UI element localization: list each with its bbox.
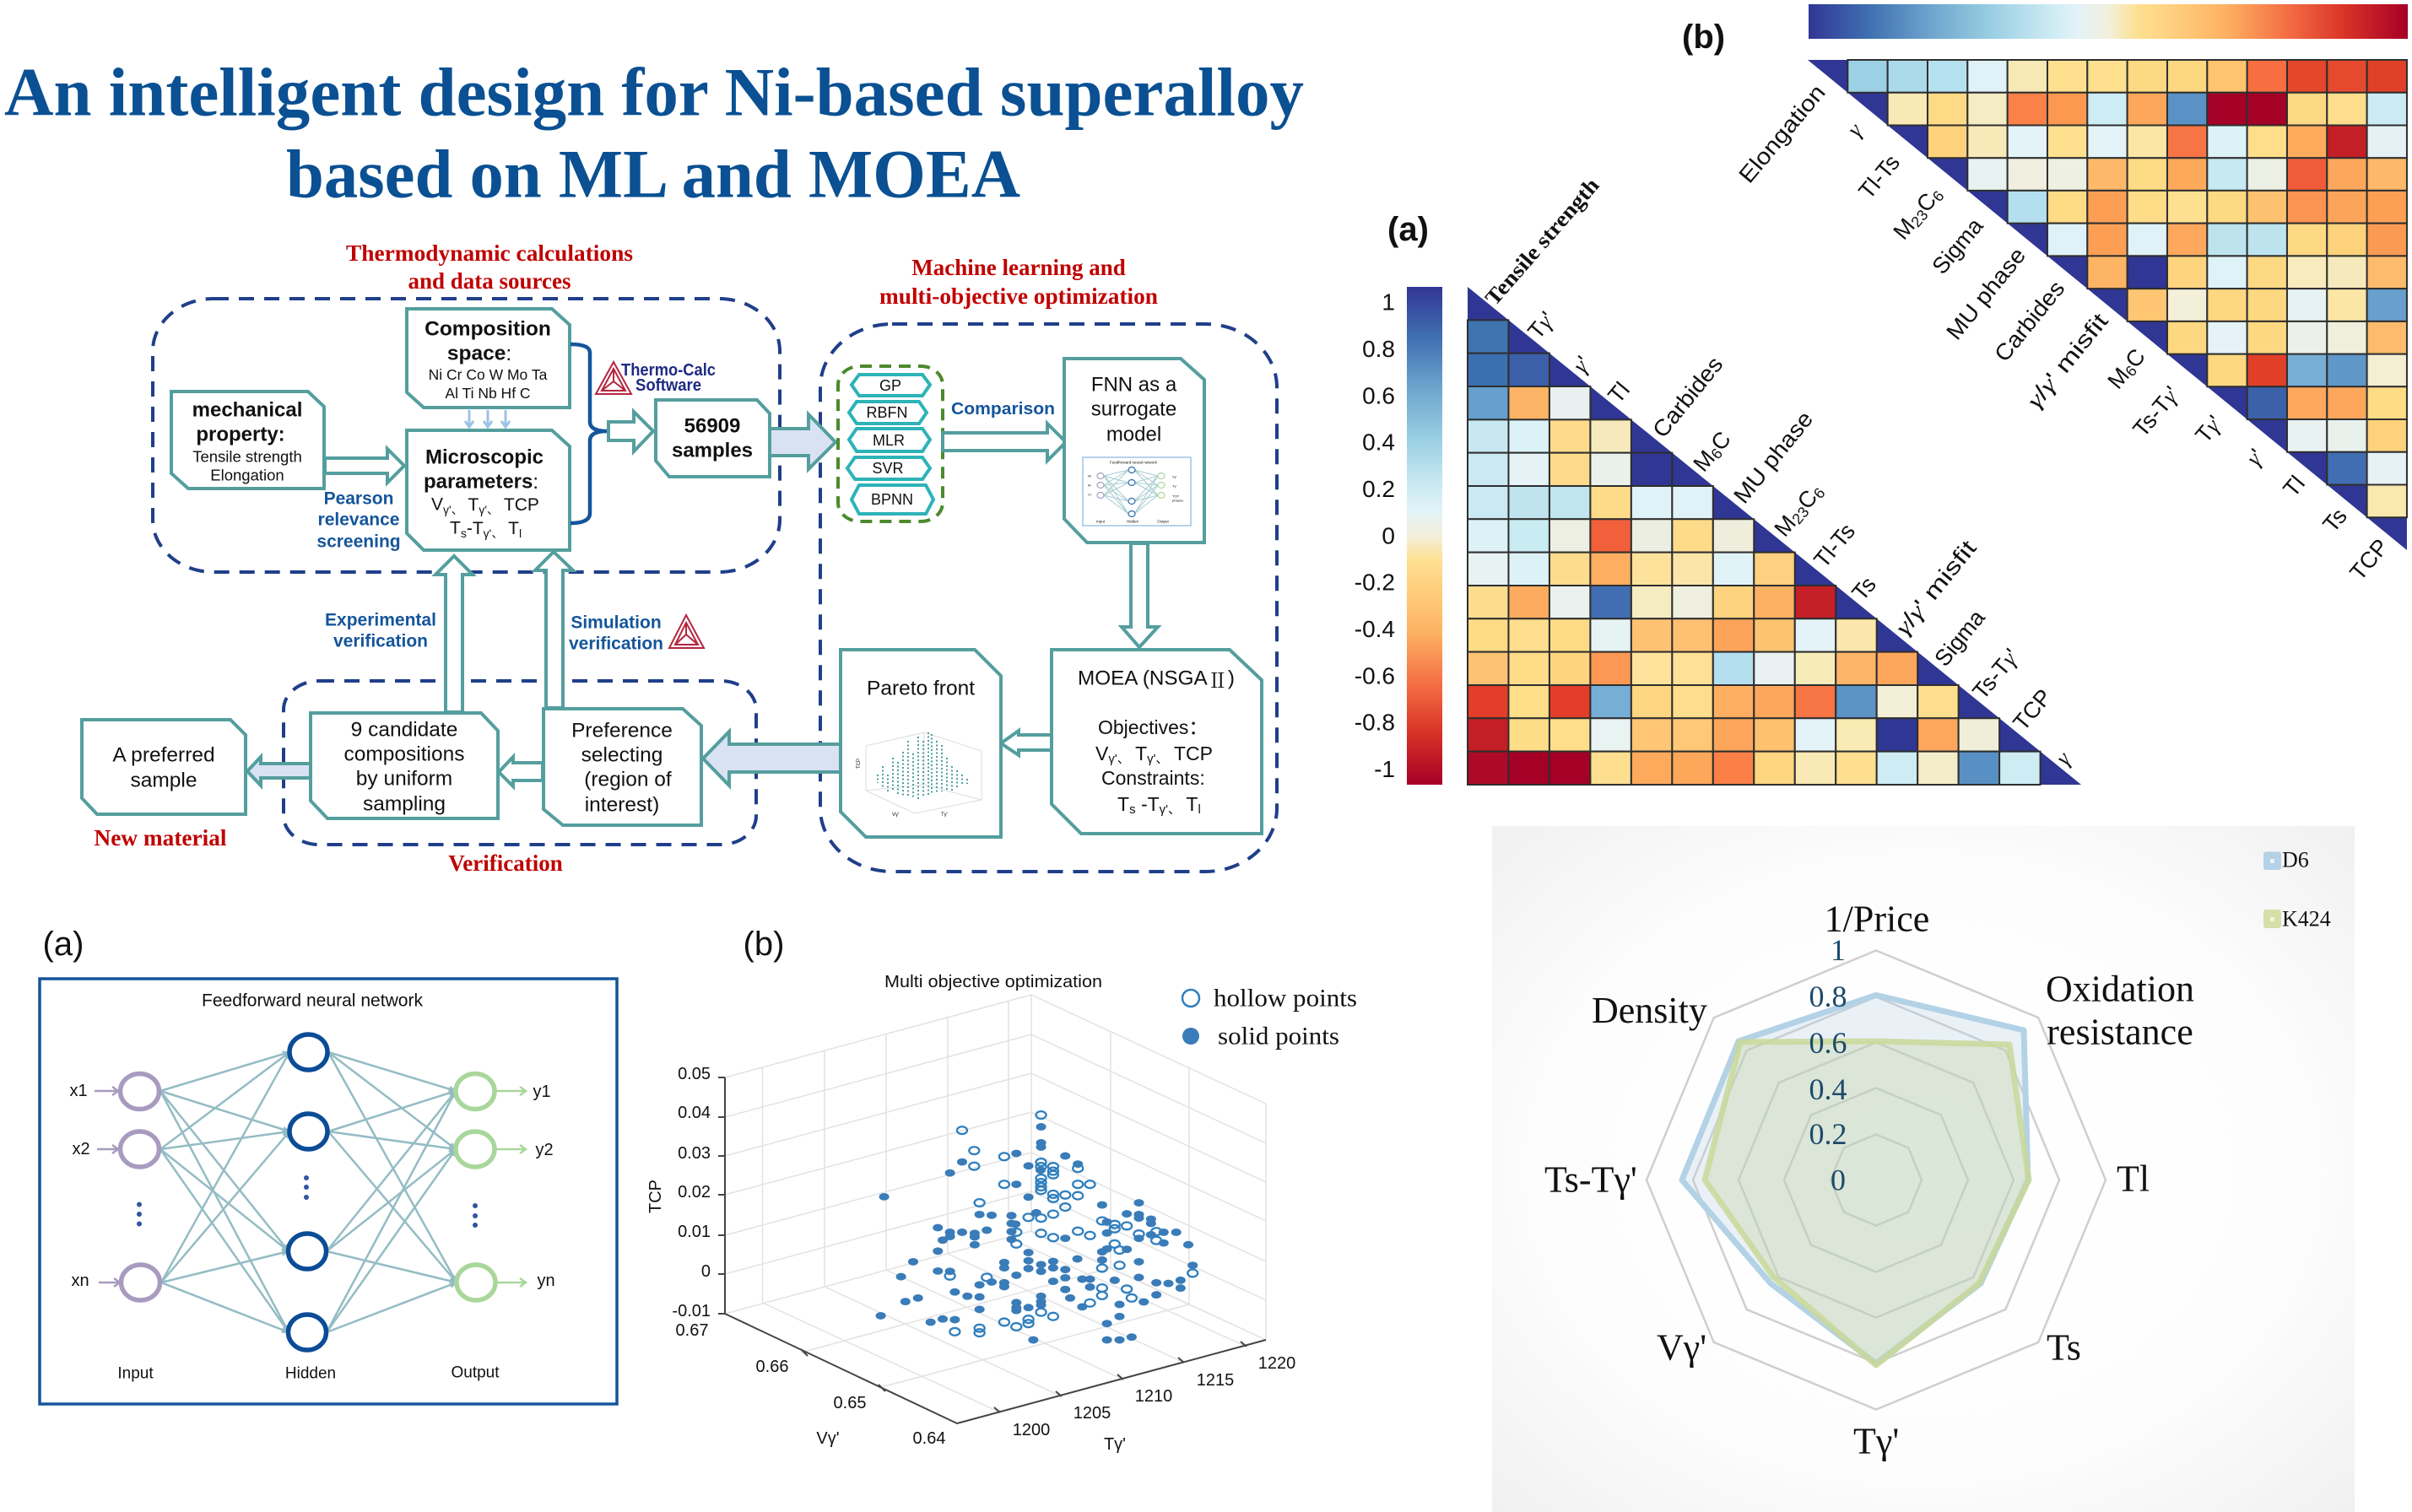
box: MOEA NSGA-II: Constraints:: [1101, 767, 1205, 789]
box: microscopic parameters: T: [463, 494, 479, 515]
box: composition space: Al Ti Nb Hf C: [445, 385, 531, 402]
panel: radar chart: [1492, 826, 2355, 1512]
column labels: 23: [1788, 504, 1813, 527]
column labels: Tγ': [1523, 307, 1560, 344]
model: MLR: [849, 429, 930, 451]
text: experimental verification: verification: [333, 631, 428, 651]
colorbar ticks: 1: [1382, 289, 1395, 316]
legend: hollow points: [1214, 984, 1357, 1012]
colorbar ticks: -0.4: [1355, 616, 1395, 642]
model: BPNN: [852, 485, 933, 514]
box: preferred sample: sample: [131, 770, 197, 791]
row labels: γ: [1842, 117, 1868, 142]
axis labels: Ts: [2047, 1326, 2081, 1369]
icon: Thermo-Calc logo: Thermo-Calc: [621, 361, 716, 380]
panel label (b): (b): [744, 926, 784, 963]
chart: mini Pareto scatter: Vγ': [892, 813, 899, 818]
V-gamma tick labels: 0.64: [913, 1429, 945, 1448]
octagon rings: [1647, 950, 2106, 1409]
dashed region: thermodynamic data: [153, 299, 780, 572]
box: microscopic parameters: T: [450, 518, 461, 538]
axis labels: Tl: [2117, 1158, 2150, 1200]
arrow: simulation verification: [535, 552, 573, 708]
heading: thermodynamic calculations: [346, 240, 633, 294]
heading: thermodynamic calculations: Thermodynamic calculations: [346, 240, 633, 266]
column labels: Ts-Tγ': [1968, 644, 2024, 705]
box: MOEA NSGA-II: TCP: [1169, 742, 1213, 764]
colorbar ticks: -0.8: [1355, 709, 1395, 736]
model: BPNN: BPNN: [871, 491, 913, 508]
chart: mini Pareto scatter: [857, 732, 982, 818]
colorbar ticks: -1: [1374, 756, 1395, 782]
text: simulation verification: [569, 613, 663, 653]
row labels: Carbides: [1989, 276, 2069, 366]
box: FNN surrogate model: [1064, 359, 1204, 543]
text: simulation verification: verification: [569, 634, 663, 653]
icon: mini neural network: phases: [1172, 498, 1183, 503]
row labels: Tl: [2279, 471, 2310, 502]
node labels: [69, 1082, 555, 1290]
arrow: MOEA to Pareto: [1001, 731, 1052, 755]
arrow: Pareto to preference: [703, 732, 841, 786]
box: mechanical property: Elongation: [210, 466, 284, 484]
hidden nodes: [289, 1034, 327, 1350]
icon: mini neural network: Vγ': [1172, 474, 1177, 479]
column labels: M: [1770, 510, 1801, 542]
panel: flowchart: [82, 240, 1277, 876]
column labels: M: [1689, 446, 1720, 477]
row labels: TCP: [2345, 534, 2393, 586]
column labels: Sigma: [1929, 604, 1990, 671]
TCP tick labels: [672, 1065, 711, 1320]
scale numbers: 0.4: [1809, 1072, 1847, 1106]
box: 9 candidate compositions: compositions: [344, 742, 464, 766]
TCP tick labels: 0: [701, 1262, 711, 1281]
icon: mini neural network: TCP: [1172, 494, 1179, 498]
column labels: γ: [2051, 746, 2076, 770]
box: mechanical property: [171, 392, 324, 489]
scale numbers: [1809, 933, 1847, 1196]
text: Pearson relevance screening: [316, 489, 401, 552]
TCP tick labels: 0.02: [678, 1183, 711, 1202]
box: microscopic parameters: Microscopic: [425, 446, 544, 469]
title: An intelligent design for Ni-based superalloy: [4, 54, 1304, 130]
box: MOEA NSGA-II: T: [1117, 793, 1129, 815]
panel: heatmap (a): [1355, 173, 2081, 785]
legend: [2263, 847, 2331, 932]
V-gamma tick labels: [676, 1321, 945, 1448]
axis labels: 1/Price: [1825, 898, 1929, 940]
row labels: M: [1889, 213, 1920, 245]
column labels: TCP: [2009, 684, 2057, 736]
chart title: Multi objective optimization: [884, 973, 1102, 991]
box: composition space: Composition: [425, 317, 551, 341]
row labels: Ts-Tγ': [2128, 381, 2184, 442]
output arrows: [496, 1087, 526, 1287]
arrow: preference to candidates: [499, 757, 543, 786]
axis labels: Vγ': [816, 1429, 840, 1448]
output nodes: [456, 1073, 495, 1300]
panel: heatmap (b): [1682, 4, 2408, 586]
ellipsis dots: [137, 1175, 478, 1228]
icon: mini neural network: Input: [1096, 520, 1106, 523]
column labels: [1480, 173, 2076, 770]
axis labels: Tγ': [1853, 1421, 1899, 1461]
heading: machine learning: multi-objective optimization: [879, 284, 1158, 309]
panel label (b): (b): [1682, 19, 1725, 56]
icon: Thermo-Calc logo: Software: [635, 376, 701, 395]
legend: D6: [2282, 847, 2309, 872]
title: [4, 54, 1304, 213]
column labels: Tl-Ts: [1809, 519, 1860, 573]
box: MOEA NSGA-II: [1052, 650, 1262, 834]
row labels: 23: [1907, 207, 1932, 230]
box: microscopic parameters: s: [461, 526, 467, 540]
row labels: Ts: [2318, 504, 2352, 537]
T-gamma tick labels: 1210: [1135, 1387, 1172, 1406]
model: RBFN: [849, 402, 927, 424]
box: preference selecting: selecting: [581, 744, 662, 766]
box: preference selecting: interest): [585, 793, 659, 817]
grid: [725, 995, 1266, 1412]
model: SVR: SVR: [872, 460, 904, 477]
box: preferred sample: [82, 720, 246, 814]
group: candidate models: [838, 366, 943, 521]
T-gamma tick labels: 1200: [1013, 1421, 1050, 1439]
row labels: Sigma: [1928, 213, 1988, 279]
label: Verification: Verification: [448, 850, 563, 876]
node labels: y1: [533, 1083, 551, 1101]
arrow: candidates to preferred sample: [247, 757, 311, 786]
scale numbers: 0.6: [1809, 1026, 1847, 1060]
scale numbers: 0: [1831, 1163, 1846, 1196]
V-gamma tick labels: 0.67: [676, 1321, 708, 1340]
T-gamma tick labels: 1215: [1197, 1371, 1234, 1390]
model: GP: GP: [879, 377, 901, 394]
T-gamma tick labels: 1205: [1074, 1404, 1111, 1423]
node labels: x2: [72, 1140, 90, 1158]
colorbar ticks: 0.4: [1362, 429, 1395, 456]
chart: mini Pareto scatter: Tγ': [941, 813, 948, 818]
arrow: FNN to MOEA: [1122, 543, 1158, 647]
row labels: [1734, 80, 2393, 586]
box: 9 candidate compositions: [311, 713, 498, 818]
bracket: [571, 344, 608, 523]
box: FNN surrogate model: model: [1106, 424, 1161, 446]
colorbar ticks: -0.2: [1355, 569, 1395, 596]
box: microscopic parameters: γ'、: [479, 503, 499, 516]
column labels: Carbides: [1647, 352, 1728, 442]
row labels: MU phase: [1941, 243, 2031, 344]
row labels: Elongation: [1734, 80, 1831, 188]
box: microscopic parameters: -T: [467, 518, 484, 538]
layer labels: [117, 1364, 500, 1382]
column labels: γ/γ' misfit: [1890, 535, 1982, 640]
axes: [718, 1077, 1266, 1423]
box: MOEA NSGA-II: MOEA (NSGAⅡ): [1078, 663, 1235, 694]
box: FNN surrogate model: FNN as a: [1091, 373, 1177, 397]
column labels: Tensile strength: [1480, 173, 1604, 310]
column labels: γ': [1568, 351, 1596, 378]
arrow: bracket to samples: [608, 412, 653, 451]
box: mechanical property: property:: [196, 424, 285, 446]
panel label (a): (a): [43, 926, 84, 963]
series: D6: [1682, 995, 2028, 1364]
hollow points: [945, 1111, 1198, 1336]
icon: mini neural network: Output: [1157, 520, 1170, 523]
box: 9 candidate compositions: sampling: [363, 793, 446, 815]
colorbar ticks: 0.2: [1362, 476, 1395, 502]
node labels: y2: [535, 1141, 554, 1159]
layer labels: Input: [117, 1365, 154, 1382]
row labels: 6: [1929, 187, 1948, 205]
box: MOEA NSGA-II: -T: [1136, 793, 1160, 815]
heading: machine learning: [879, 255, 1158, 309]
model: RBFN: RBFN: [866, 404, 908, 421]
box: MOEA NSGA-II: γ'、: [1147, 751, 1169, 766]
colorbar ticks: 0: [1382, 523, 1395, 548]
TCP tick labels: 0.01: [678, 1223, 711, 1241]
icon: Thermo-Calc logo: [596, 361, 716, 395]
row labels: C: [1912, 188, 1941, 217]
column labels: C: [1793, 485, 1822, 514]
column labels: C: [1706, 427, 1736, 456]
V-gamma tick labels: 0.66: [756, 1358, 788, 1376]
scale numbers: 0.2: [1809, 1117, 1847, 1151]
box: FNN surrogate model: surrogate: [1091, 398, 1176, 420]
icon: mini neural network: Feedforward neural network: [1110, 461, 1158, 464]
box: 9 candidate compositions: by uniform: [356, 768, 452, 790]
colorbar ticks: -0.6: [1355, 663, 1395, 688]
column labels: MU phase: [1728, 407, 1818, 508]
arrow: experimental verification: [435, 556, 473, 712]
model: SVR: [847, 457, 930, 479]
input arrows: [95, 1087, 120, 1287]
box: 56909 samples: 56909: [684, 415, 740, 437]
panel: neural network (a): [40, 926, 617, 1404]
axis labels: [646, 1180, 1126, 1454]
colorbar ticks: 0.8: [1362, 336, 1395, 362]
legend: K424: [2282, 906, 2331, 932]
column labels: Tl: [1603, 377, 1635, 408]
row labels: Tl-Ts: [1854, 150, 1905, 204]
T-gamma tick labels: 1220: [1258, 1354, 1295, 1373]
scale numbers: 0.8: [1809, 980, 1847, 1013]
model: GP: [852, 375, 930, 396]
series: K424: [1705, 1041, 2029, 1365]
icon: mini neural network: Ni: [1088, 474, 1091, 478]
points: [881, 1111, 1198, 1340]
axis labels: [1544, 898, 2194, 1461]
box: composition space: space:: [447, 343, 511, 364]
icon: mini neural network: Cr: [1088, 493, 1092, 496]
box: microscopic parameters: γ'、: [484, 526, 503, 540]
box: 56909 samples: samples: [672, 439, 753, 462]
box: MOEA NSGA-II: T: [1130, 742, 1147, 764]
input nodes: [120, 1073, 160, 1300]
label: Comparison: Comparison: [951, 400, 1055, 418]
box: microscopic parameters: parameters:: [424, 471, 538, 493]
axis labels: Oxidation: [2046, 969, 2194, 1009]
heatmap cells: [1468, 287, 2081, 785]
box: MOEA NSGA-II: s: [1129, 802, 1136, 817]
axis labels: Ts-Tγ': [1544, 1159, 1637, 1200]
column labels: 6: [1707, 446, 1726, 462]
colorbar ticks: [1355, 289, 1395, 782]
text: experimental verification: Experimental: [325, 611, 436, 629]
TCP tick labels: 0.03: [678, 1144, 711, 1163]
dashed region: verification: [284, 681, 756, 845]
solid points: [881, 1126, 1192, 1340]
box: MOEA NSGA-II: γ'、: [1160, 802, 1181, 817]
box: microscopic parameters: T: [503, 518, 519, 538]
colorbar: [1809, 4, 2408, 39]
box: preferred sample: A preferred: [112, 744, 215, 766]
node labels: xn: [71, 1272, 89, 1290]
node labels: x1: [69, 1082, 88, 1100]
arrow: models to FNN: [943, 424, 1066, 461]
box: Pareto front: [841, 650, 1001, 837]
row labels: γ/γ' misfit: [2021, 308, 2113, 413]
title: based on ML and MOEA: [286, 135, 1020, 213]
text: Pearson relevance screening: relevance: [318, 510, 399, 530]
TCP tick labels: -0.01: [672, 1302, 711, 1320]
axis labels: Density: [1592, 990, 1707, 1031]
panel label (a): (a): [1387, 211, 1429, 248]
column labels: 6: [1810, 484, 1829, 502]
box: microscopic parameters: l: [519, 526, 522, 540]
layer labels: Output: [451, 1364, 500, 1382]
box: mechanical property: mechanical: [192, 398, 302, 422]
chart: mini Pareto scatter: TCP: [857, 759, 862, 769]
background: [1492, 826, 2355, 1512]
box: mechanical property: Tensile strength: [192, 447, 302, 466]
axis labels: Vγ': [1657, 1326, 1706, 1369]
icon: mini neural network: Tγ': [1172, 484, 1176, 488]
layer labels: Hidden: [285, 1365, 336, 1382]
connections: [160, 1052, 457, 1332]
box: MOEA NSGA-II: l: [1198, 802, 1201, 817]
text: experimental verification: [325, 611, 436, 651]
text: Pearson relevance screening: screening: [316, 532, 401, 552]
box: microscopic parameters: γ'、: [443, 503, 463, 516]
box: 9 candidate compositions: 9 candidate: [351, 719, 457, 741]
box: MOEA NSGA-II: V: [1095, 742, 1108, 764]
box: microscopic parameters: TCP: [499, 494, 539, 515]
icon: Thermo-Calc triangle: [669, 615, 704, 648]
heatmap cells: [1808, 60, 2407, 550]
box: Pareto front: Pareto front: [867, 677, 975, 700]
row labels: C: [2120, 344, 2150, 373]
arrow: mechanical property to microscopic: [325, 449, 404, 483]
box: MOEA NSGA-II: Objectives：: [1098, 716, 1208, 738]
box: 56909 samples: [656, 400, 770, 477]
box: MOEA NSGA-II: γ'、: [1108, 751, 1130, 766]
box: preference selecting: (region of: [584, 768, 672, 791]
arrows: composition to microscopic: [465, 410, 510, 427]
row labels: Tγ': [2191, 411, 2227, 448]
box: MOEA NSGA-II: T: [1181, 793, 1198, 815]
icon: mini neural network: Al: [1088, 483, 1091, 488]
axis labels: TCP: [646, 1180, 665, 1213]
text: simulation verification: Simulation: [571, 613, 662, 633]
node labels: yn: [537, 1272, 555, 1290]
box: composition space: [407, 309, 570, 408]
TCP tick labels: 0.05: [678, 1065, 711, 1083]
T-gamma tick labels: [1013, 1354, 1295, 1439]
scale numbers: 1: [1831, 933, 1846, 967]
box: microscopic parameters: V: [431, 494, 443, 515]
heading: machine learning: Machine learning and: [911, 255, 1126, 280]
label: New material: New material: [95, 825, 227, 850]
axis labels: resistance: [2047, 1011, 2193, 1053]
legend: [1182, 984, 1357, 1050]
row labels: γ': [2242, 444, 2269, 471]
text: Pearson relevance screening: Pearson: [324, 489, 393, 508]
column labels: Ts: [1847, 572, 1881, 606]
icon: mini neural network: Hidden: [1127, 520, 1139, 523]
model: MLR: MLR: [873, 432, 905, 449]
TCP tick labels: 0.04: [678, 1104, 711, 1122]
chart title: Feedforward neural network: [202, 991, 423, 1011]
dashed region: machine learning: [820, 324, 1277, 872]
icon: mini neural network: [1083, 457, 1191, 526]
row labels: M: [2103, 363, 2134, 394]
row labels: 6: [2122, 363, 2140, 380]
box: preference selecting: [544, 709, 701, 825]
legend: solid points: [1218, 1023, 1339, 1050]
frame: [40, 979, 617, 1404]
box: preference selecting: Preference: [571, 719, 673, 742]
axis labels: Tγ': [1104, 1435, 1126, 1454]
arrow: samples to models: [770, 414, 836, 469]
heading: thermodynamic calculations: and data sources: [408, 268, 571, 294]
box: microscopic parameters: [407, 430, 570, 550]
colorbar: [1407, 287, 1442, 785]
colorbar ticks: 0.6: [1362, 383, 1395, 408]
box: composition space: Ni Cr Co W Mo Ta: [429, 366, 548, 383]
panel: 3D scatter (b): [646, 926, 1357, 1454]
V-gamma tick labels: 0.65: [834, 1394, 866, 1412]
